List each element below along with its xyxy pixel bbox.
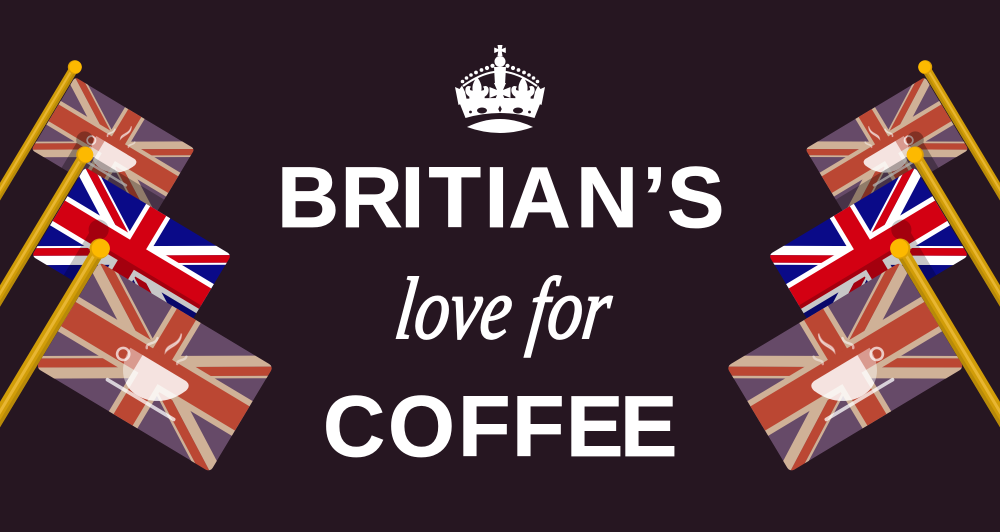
crown base xyxy=(467,119,533,133)
title: COFFEE: COFFEE xyxy=(323,379,677,475)
side ornaments xyxy=(455,86,467,105)
shadow on middle flag xyxy=(0,216,284,530)
crown band xyxy=(458,98,542,118)
title: BRITIAN'S: BRITIAN’S xyxy=(277,150,724,246)
orb xyxy=(494,56,506,67)
shadow on top flag xyxy=(0,128,241,393)
fleurs-de-lis xyxy=(466,78,488,104)
arch jewels xyxy=(461,64,539,83)
cross on top of crown xyxy=(494,45,506,56)
centre cross pattee xyxy=(490,83,510,102)
arch bands xyxy=(463,72,537,86)
flag pole: middle xyxy=(0,143,96,321)
subtitle: love for: love for xyxy=(391,260,617,358)
flag: top muted with coffee cup xyxy=(23,68,203,231)
flags: left group xyxy=(0,58,286,530)
icon: crown xyxy=(455,45,545,133)
flag pole: bottom xyxy=(0,235,114,446)
band jewels xyxy=(469,106,531,114)
flag: bottom muted with coffee cup xyxy=(23,248,286,486)
flags: right group (mirrored) xyxy=(714,58,1000,530)
flag: middle bright Union Jack xyxy=(21,156,242,355)
flag pole: top xyxy=(0,58,84,203)
